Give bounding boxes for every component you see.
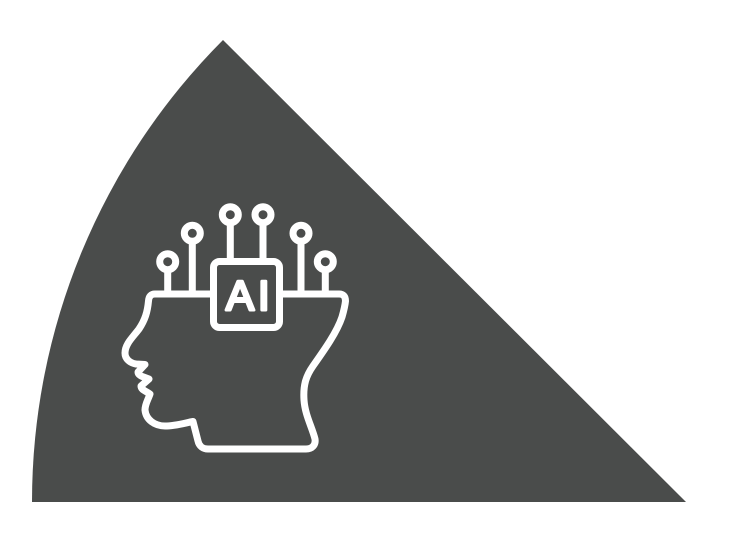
icon: AI chip frame [214,262,280,328]
icon: circuit nodes [160,207,333,294]
icon label: AI: AI [226,272,270,319]
icon: AI head with circuit nodes [125,207,346,449]
icon: head profile outline [125,294,346,449]
panel: dark curved triangle sector [32,40,686,502]
